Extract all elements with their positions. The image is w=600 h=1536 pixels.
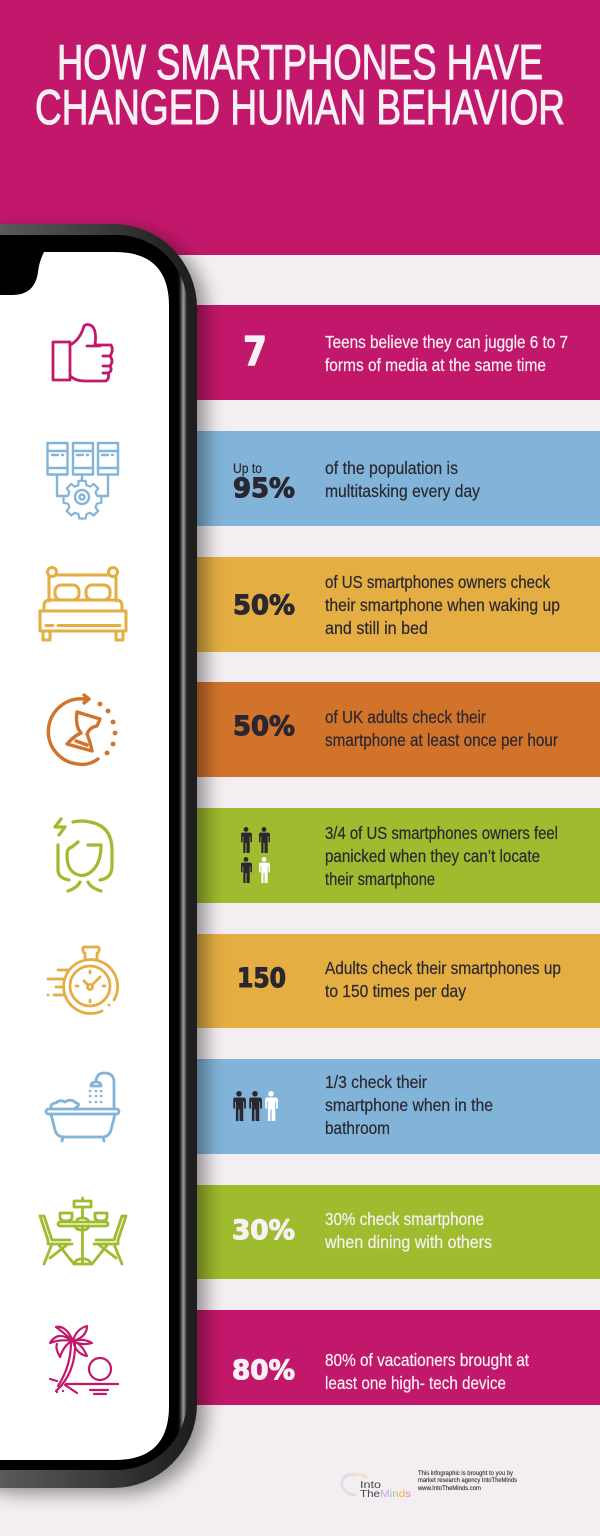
phone notch (0, 252, 44, 295)
row 8: dining (190, 1185, 600, 1279)
row 7: bathroom (190, 1059, 600, 1154)
row 9: vacation (190, 1310, 600, 1405)
row 9: vacation: least one high- tech device (325, 1373, 506, 1393)
row 8: dining: 30% (232, 1215, 295, 1246)
logo: IntoTheMinds: The Minds (360, 1489, 411, 1500)
credit text: market research agency IntoTheMinds (418, 1477, 518, 1484)
row 9: vacation: 80% of vacationers brought at (325, 1350, 529, 1370)
row 7: bathroom: smartphone when in the (325, 1095, 493, 1115)
row 5: panicked: 3/4 of US smartphones owners feel (325, 823, 558, 843)
row 3: waking up (190, 557, 600, 652)
row 1: teens: Teens believe they can juggle 6 to 7 (325, 332, 568, 352)
row 6: 150 times: to 150 times per day (325, 981, 466, 1001)
icon: bathtub (46, 1073, 119, 1141)
title (35, 36, 565, 135)
row 5: panicked: their smartphone (325, 869, 435, 889)
row 2: multitasking: Up to (233, 460, 262, 476)
row 2: multitasking: of the population is (325, 458, 458, 478)
row 9: vacation: 80% (232, 1355, 295, 1386)
people icon: one of three (233, 1091, 278, 1121)
icon: stopwatch (48, 947, 118, 1014)
icon: thumbs up (53, 324, 112, 381)
row 6: 150 times: 150 (237, 963, 286, 994)
icon: servers and gear (48, 443, 118, 519)
row 5: panicked (190, 808, 600, 903)
row 4: UK adults: 50% (233, 711, 295, 742)
row 2: multitasking (190, 431, 600, 526)
credit text: This infographic is brought to you by (418, 1470, 514, 1477)
phone shadow (0, 230, 206, 1494)
icon: panicked person (55, 819, 112, 891)
logo brain mark (342, 1474, 367, 1495)
row 3: waking up: of US smartphones owners check (325, 572, 550, 592)
logo: IntoTheMinds: Into (360, 1480, 382, 1491)
row 7: bathroom: bathroom (325, 1118, 390, 1138)
row 8: dining: when dining with others (324, 1232, 492, 1252)
icon: dining table (40, 1198, 126, 1264)
row 5: panicked: panicked when they can’t locate (325, 846, 540, 866)
phone screen (0, 252, 169, 1460)
icon: bed (40, 568, 126, 640)
row 2: multitasking: 95% (233, 473, 295, 504)
row 3: waking up: 50% (233, 590, 295, 621)
row 7: bathroom: 1/3 check their (325, 1072, 427, 1092)
row 8: dining: 30% check smartphone (325, 1209, 484, 1229)
phone (0, 224, 197, 1488)
credit text: www.IntoTheMinds.com (417, 1485, 481, 1492)
row 6: 150 times: Adults check their smartphones up (325, 958, 561, 978)
row 4: UK adults: of UK adults check their (325, 707, 486, 727)
header band (0, 0, 600, 255)
icon: hourglass refresh (48, 695, 115, 764)
row 4: UK adults: smartphone at least once per hour (325, 730, 558, 750)
row 1: teens: forms of media at the same time (325, 355, 546, 375)
row 3: waking up: and still in bed (325, 618, 428, 638)
row 4: UK adults (190, 682, 600, 777)
row 3: waking up: their smartphone when waking up (325, 595, 560, 615)
logo: IntoTheMinds (342, 1474, 411, 1500)
people icon: three of four (241, 827, 270, 883)
row 2: multitasking: multitasking every day (325, 481, 480, 501)
credit text (417, 1470, 518, 1492)
row 1: teens (190, 305, 600, 400)
icon: palm tree beach (50, 1326, 118, 1394)
row 6: 150 times (190, 934, 600, 1028)
row 1: teens: 7 (243, 329, 267, 375)
